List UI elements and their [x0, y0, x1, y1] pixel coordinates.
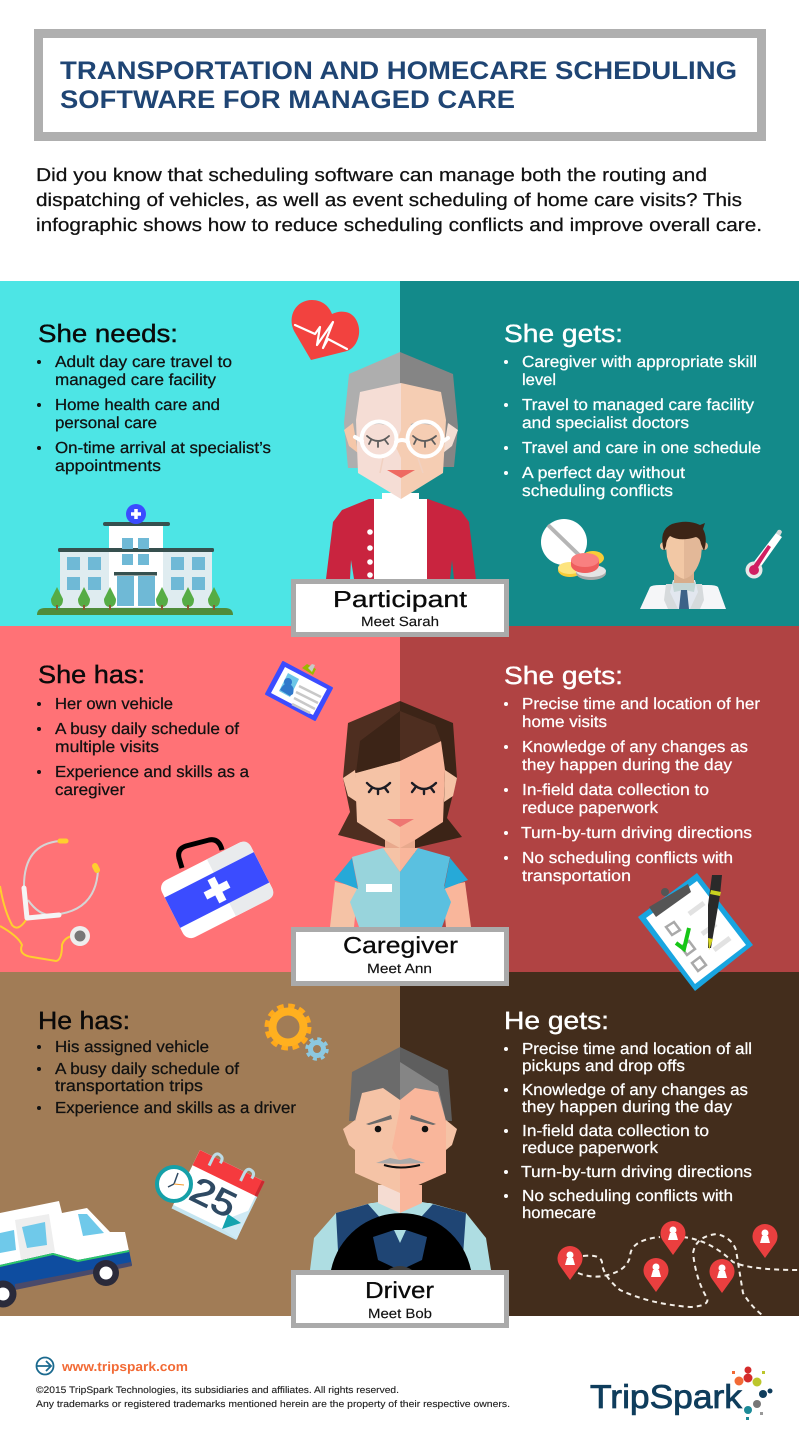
list: caregiver gets: they happen during the day — [522, 757, 732, 774]
list: driver gets: Knowledge of any changes as — [522, 1082, 748, 1099]
icon: transport van — [0, 1201, 132, 1308]
panel: driver has — [0, 972, 400, 1316]
icon: doctor — [640, 522, 726, 609]
name box: caregiver: Caregiver — [343, 932, 458, 958]
copyright text — [36, 1385, 510, 1410]
icon: gears — [267, 1006, 327, 1059]
panel: caregiver has — [0, 626, 400, 972]
list: caregiver gets: Knowledge of any changes as — [522, 739, 748, 756]
list: driver gets: Turn-by-turn driving directions — [521, 1164, 752, 1181]
list: driver has: transportation trips — [55, 1078, 203, 1095]
list: participant gets — [504, 354, 761, 500]
name box: participant: Participant — [333, 586, 468, 612]
list: participant needs — [37, 354, 271, 475]
red cardigan — [326, 499, 374, 579]
name box: participant: Meet Sarah — [361, 614, 439, 629]
copyright text: Any trademarks or registered trademarks mentioned herein are the property of their respective owners. — [36, 1399, 510, 1410]
list: caregiver gets: No scheduling conflicts with — [522, 850, 733, 867]
icon: hospital — [37, 504, 233, 615]
icon: route map with pins — [558, 1221, 799, 1315]
title — [60, 57, 737, 114]
intro text: infographic shows how to reduce scheduling conflicts and improve overall care. — [36, 214, 762, 235]
TripSpark logo — [590, 1366, 772, 1420]
list: caregiver has: Her own vehicle — [55, 696, 173, 713]
icon: arrow circle — [36, 1358, 54, 1374]
name box: caregiver: Meet Ann — [367, 961, 432, 976]
icon: first aid kit — [158, 839, 276, 941]
list: participant needs: appointments — [55, 458, 161, 475]
list: driver gets: homecare — [522, 1205, 596, 1222]
list: participant needs: personal care — [55, 415, 157, 432]
list: participant gets: Travel to managed care facility — [522, 397, 754, 414]
heading: she gets: She gets: — [504, 320, 623, 348]
name box: participant — [294, 582, 506, 634]
name box: caregiver — [294, 930, 506, 984]
list: caregiver has: Experience and skills as a — [55, 764, 249, 781]
list: participant gets: Travel and care in one schedule — [522, 440, 761, 457]
shirt and vest — [310, 1203, 491, 1270]
list: caregiver has — [37, 696, 249, 799]
list: caregiver gets: home visits — [522, 714, 607, 731]
heading: he has: He has: — [38, 1007, 130, 1035]
list: driver gets: reduce paperwork — [522, 1140, 659, 1157]
list: caregiver gets — [504, 696, 761, 885]
footer link: www.tripspark.com — [61, 1359, 188, 1374]
list: caregiver gets: transportation — [522, 868, 631, 885]
list: participant gets: Caregiver with appropriate skill — [522, 354, 757, 371]
icon: clipboard and pen — [638, 873, 753, 991]
list: participant needs: Home health care and — [55, 397, 220, 414]
heading: she gets: She gets: — [504, 662, 623, 690]
panel: participant gets — [400, 281, 799, 626]
list: participant gets: and specialist doctors — [522, 415, 689, 432]
footer link — [36, 1358, 188, 1374]
list: participant gets: A perfect day without — [522, 465, 686, 482]
list: driver has: Experience and skills as a driver — [55, 1100, 297, 1117]
name box: driver: Meet Bob — [368, 1306, 432, 1321]
list: caregiver gets: Precise time and location of her — [522, 696, 761, 713]
name box: driver: Driver — [365, 1277, 434, 1303]
list: driver gets: pickups and drop offs — [522, 1058, 685, 1075]
list: driver has: His assigned vehicle — [55, 1039, 209, 1056]
list: participant gets: scheduling conflicts — [522, 483, 673, 500]
list: caregiver has: multiple visits — [55, 739, 159, 756]
list: caregiver gets: In-field data collection to — [522, 782, 709, 799]
icon: id badge — [266, 662, 332, 720]
heading: he gets: He gets: — [504, 1007, 609, 1035]
arms — [330, 882, 358, 927]
list: participant needs: On-time arrival at specialist’s — [55, 440, 271, 457]
panel: caregiver gets — [400, 626, 799, 972]
list: caregiver gets: Turn-by-turn driving directions — [521, 825, 752, 842]
icon: thermometer — [746, 530, 782, 578]
list: caregiver gets: reduce paperwork — [522, 800, 659, 817]
icon: calendar and clock: 25 — [184, 1169, 243, 1226]
list: participant needs: managed care facility — [55, 372, 216, 389]
heading: she has: She has: — [38, 661, 145, 689]
list: driver gets: they happen during the day — [522, 1099, 732, 1116]
character: Sarah the participant — [326, 352, 476, 579]
list: caregiver has: caregiver — [55, 782, 126, 799]
list: driver gets: No scheduling conflicts with — [522, 1188, 733, 1205]
icon: stethoscope — [0, 841, 98, 961]
list: caregiver has: A busy daily schedule of — [55, 721, 240, 738]
steering wheel — [331, 1213, 471, 1270]
scrubs — [350, 848, 400, 927]
name box: driver — [294, 1272, 506, 1326]
list: driver gets: Precise time and location of all — [522, 1041, 752, 1058]
TripSpark logo: TripSpark — [590, 1378, 743, 1415]
character: Bob the driver — [310, 1047, 491, 1270]
heading: she needs: She needs: — [38, 320, 178, 348]
list: participant needs: Adult day care travel to — [55, 354, 232, 371]
list: driver has: A busy daily schedule of — [55, 1061, 240, 1078]
title: TRANSPORTATION AND HOMECARE SCHEDULING — [60, 57, 737, 85]
intro text: Did you know that scheduling software can manage both the routing and — [36, 164, 707, 185]
list: driver gets — [504, 1041, 752, 1222]
copyright text: ©2015 TripSpark Technologies, its subsidiaries and affiliates. All rights reserved. — [36, 1385, 399, 1396]
icon: pills — [541, 519, 606, 580]
list: driver has — [37, 1039, 297, 1117]
list: participant gets: level — [522, 372, 556, 389]
list: driver gets: In-field data collection to — [522, 1123, 709, 1140]
panel: driver gets — [400, 972, 799, 1316]
panel: participant needs — [0, 281, 400, 626]
intro text: dispatching of vehicles, as well as event scheduling of home care visits? This — [36, 189, 742, 210]
icon: heart with pulse — [292, 300, 359, 360]
title box — [38, 34, 762, 136]
character: Ann the caregiver — [330, 701, 471, 927]
intro text — [36, 164, 762, 235]
title: SOFTWARE FOR MANAGED CARE — [60, 86, 515, 114]
icon: calendar and clock — [157, 1146, 267, 1240]
